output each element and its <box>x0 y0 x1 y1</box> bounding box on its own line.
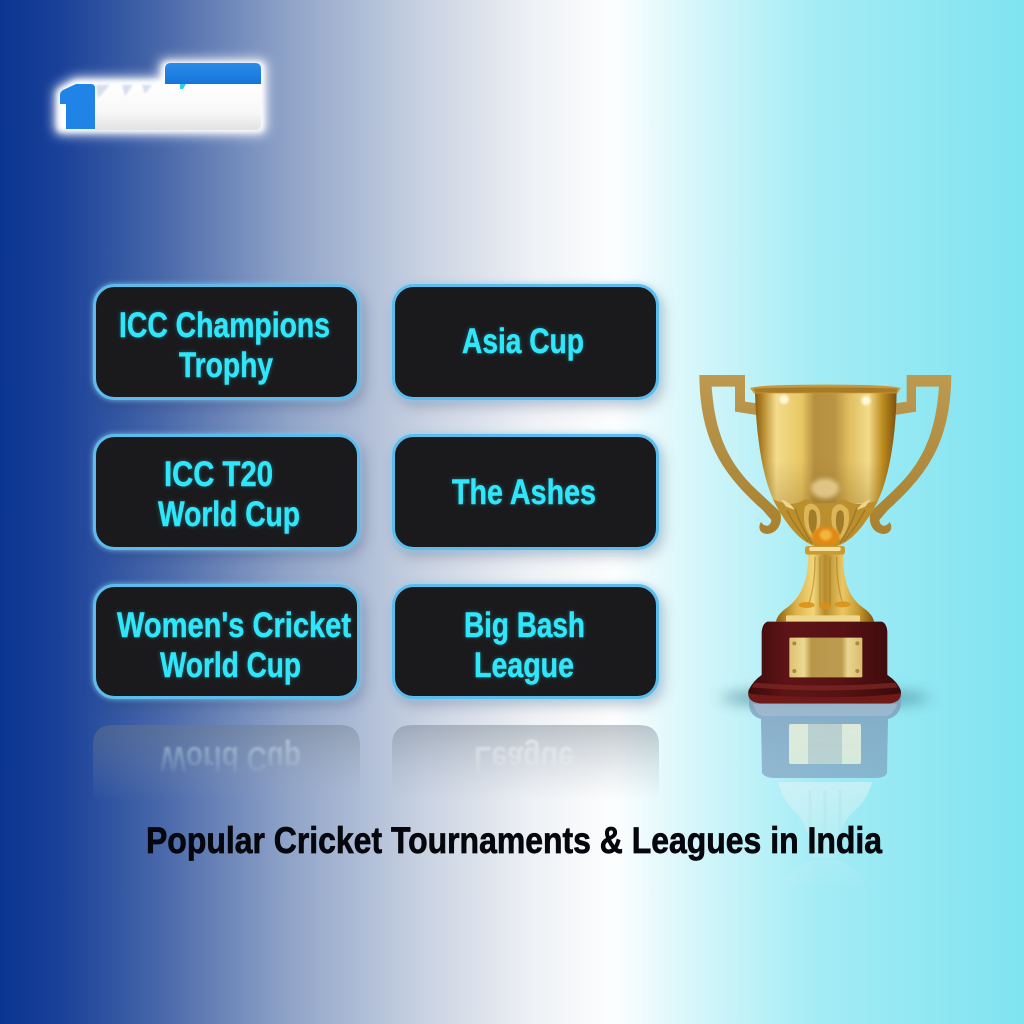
reflection of lower panels: League <box>474 739 574 778</box>
panel: The Ashes <box>394 436 658 548</box>
logo <box>60 63 261 130</box>
brass plate <box>789 638 862 677</box>
panel: ICC T20 World Cup: World Cup <box>158 495 300 534</box>
panel: Asia Cup: Asia Cup <box>462 322 584 361</box>
panel: Asia Cup <box>394 286 658 398</box>
panel: ICC T20 World Cup: ICC T20 <box>164 455 273 494</box>
right handle <box>870 375 951 534</box>
icon: gold trophy <box>699 375 951 703</box>
panel: Women's Cricket World Cup: World Cup <box>160 646 301 685</box>
stem <box>776 553 874 622</box>
trophy reflection <box>749 696 901 865</box>
panel: Big Bash League: Big Bash <box>464 606 585 645</box>
panel: The Ashes: The Ashes <box>452 473 596 512</box>
panel: ICC Champions Trophy: ICC Champions <box>119 306 330 345</box>
panel: ICC Champions Trophy <box>94 286 358 398</box>
reflection of lower panels <box>93 725 659 786</box>
panel: ICC Champions Trophy: Trophy <box>179 346 273 385</box>
panel: Big Bash League <box>394 586 658 698</box>
left handle <box>699 375 781 534</box>
cup body <box>755 392 897 546</box>
panel: ICC T20 World Cup <box>94 436 358 548</box>
reflection of lower panels: World Cup <box>160 739 301 778</box>
cup rim <box>750 385 901 393</box>
panel: Women's Cricket World Cup: Women's Cricket <box>117 606 351 645</box>
trophy shadow <box>720 691 930 705</box>
cup lower shade <box>766 471 884 546</box>
wooden base <box>748 622 901 703</box>
panel: Big Bash League: League <box>474 646 574 685</box>
panel: Women's Cricket World Cup <box>94 586 358 698</box>
title: Popular Cricket Tournaments & Leagues in India <box>146 820 882 861</box>
cup highlights <box>779 395 789 404</box>
